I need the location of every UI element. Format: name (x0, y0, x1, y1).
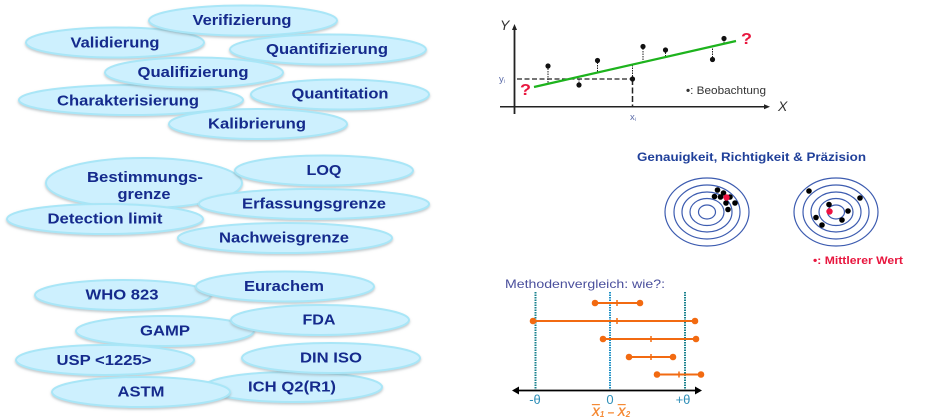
tick labels (499, 74, 636, 123)
term: FDA: FDA (302, 312, 336, 328)
legend: Beobachtung: •: Beobachtung (686, 85, 766, 97)
term: GAMP (76, 316, 254, 346)
chart: linear regression (499, 17, 788, 123)
term: Validierung (26, 28, 204, 58)
term: Quantitation (251, 80, 429, 110)
axis values (529, 392, 690, 407)
question marks: ? (520, 82, 531, 99)
axis labels: Y (500, 17, 511, 33)
term: Bestimmungsgrenze: grenze (118, 186, 170, 203)
axes (500, 24, 770, 114)
cluster: guidelines (16, 272, 420, 407)
trend line (534, 41, 736, 87)
term: Nachweisgrenze: Nachweisgrenze (219, 230, 349, 246)
term: Quantitation: Quantitation (292, 86, 388, 102)
term: ASTM: ASTM (118, 384, 164, 400)
term: Erfassungsgrenze (199, 189, 429, 219)
term: Verifizierung: Verifizierung (192, 12, 292, 29)
equivalence limits (536, 292, 685, 390)
axis labels: X (777, 98, 788, 114)
heading: method comparison: Methodenvergleich: wie?: (505, 277, 665, 291)
term: LOQ: LOQ (306, 162, 342, 179)
tick labels: i (504, 79, 505, 85)
term: Detection limit (7, 204, 203, 234)
number line (512, 386, 702, 394)
axis labels (500, 17, 788, 114)
term: Eurachem: Eurachem (244, 278, 324, 295)
axis values: 0 (606, 392, 614, 407)
term: Quantifizierung (230, 34, 426, 64)
term: LOQ (235, 156, 413, 186)
term: Qualifizierung: Qualifizierung (138, 64, 248, 81)
axis label: X (617, 405, 627, 419)
guide lines (517, 39, 724, 106)
term: Kalibrierung: Kalibrierung (208, 116, 306, 132)
term: Erfassungsgrenze: Erfassungsgrenze (242, 196, 386, 212)
term: ICH Q2(R1): ICH Q2(R1) (248, 378, 336, 396)
target: biased and precise (665, 178, 749, 246)
term: Bestimmungsgrenze (46, 158, 242, 208)
heading: accuracy and precision: Genauigkeit, Richtigkeit & Präzision (637, 150, 866, 164)
interval bars (530, 300, 704, 378)
term: Charakterisierung (19, 85, 243, 115)
term: FDA (231, 305, 409, 335)
chart: confidence intervals (512, 292, 704, 419)
term: WHO 823: WHO 823 (86, 286, 158, 304)
question marks (520, 31, 752, 99)
term: DIN ISO (242, 343, 420, 373)
term: USP 1225 (16, 345, 194, 375)
term: Quantifizierung: Quantifizierung (266, 41, 388, 58)
legend: Mittlerer Wert: •: Mittlerer Wert (813, 255, 903, 267)
term: Eurachem (196, 272, 374, 302)
axis values: +θ (676, 392, 690, 407)
tick labels: x (630, 112, 635, 123)
term: ICH Q2(R1) (204, 372, 382, 402)
axis label: X (591, 405, 601, 419)
axis label: 1 (600, 410, 605, 419)
term: Nachweisgrenze (178, 223, 392, 253)
term: Validierung: Validierung (70, 34, 160, 52)
term: USP 1225: USP <1225> (56, 352, 152, 369)
axis values: -θ (529, 392, 541, 407)
term: ASTM (52, 377, 230, 407)
axis label: – (604, 405, 618, 419)
term: Charakterisierung: Charakterisierung (57, 92, 199, 110)
cluster: limit terms (7, 156, 429, 253)
tick labels: y (499, 74, 504, 85)
term: Detection limit: Detection limit (48, 210, 162, 228)
term: DIN ISO: DIN ISO (300, 350, 362, 366)
question marks: ? (741, 31, 752, 48)
tick labels: i (635, 117, 636, 123)
term: GAMP: GAMP (140, 322, 190, 340)
observation points (545, 36, 727, 88)
axis label: 2 (625, 410, 631, 419)
target: centred and scattered (794, 178, 878, 246)
term: Bestimmungsgrenze: Bestimmungs- (87, 169, 203, 186)
term: Verifizierung (149, 6, 337, 36)
cluster: method terms (19, 6, 429, 139)
term: Qualifizierung (105, 58, 283, 88)
term: Kalibrierung (169, 109, 347, 139)
term: WHO 823 (35, 280, 211, 310)
